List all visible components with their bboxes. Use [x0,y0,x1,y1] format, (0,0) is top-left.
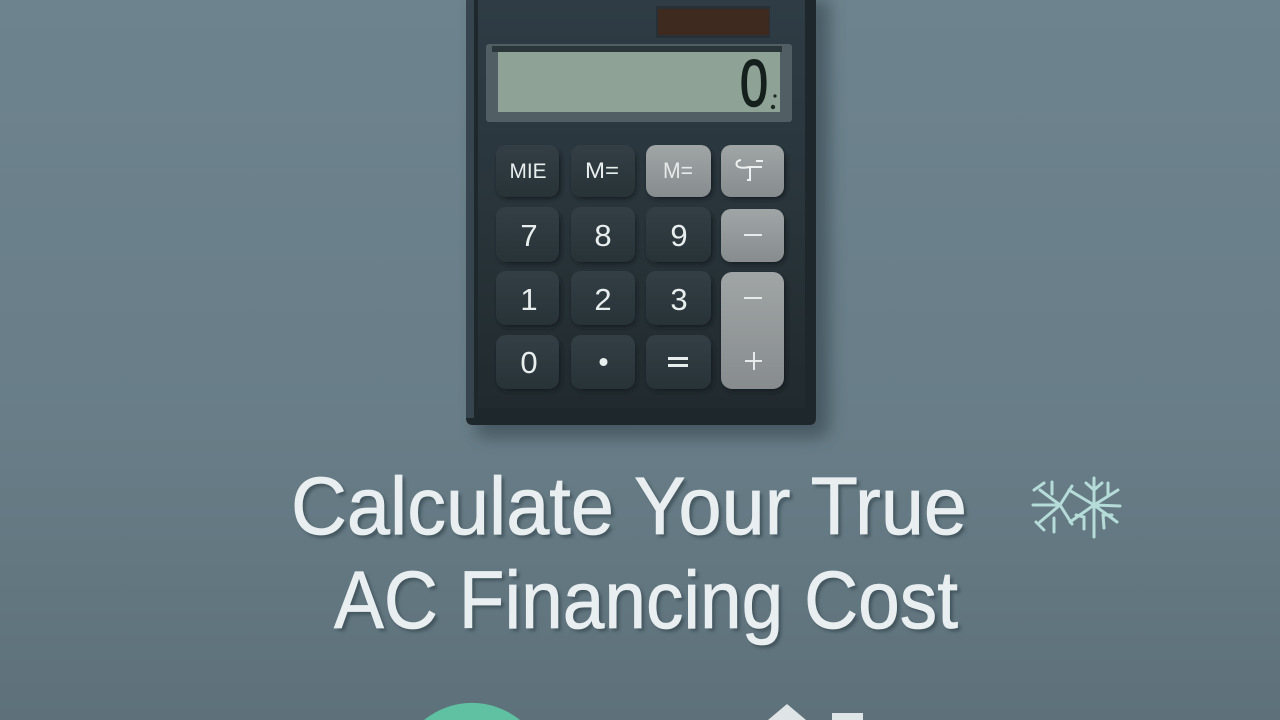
title text: AC Financing Cost [334,555,958,646]
key row 1: M= [663,158,693,183]
key row 2: 7 [520,218,538,253]
key row 2: 9 [670,218,688,253]
title [291,461,970,649]
key row 1: MIE [510,160,546,183]
display digit: 0 [740,46,768,120]
key row 3: 1 [520,282,538,317]
title text: Calculate Your True [291,461,967,552]
display [486,44,792,122]
icon: snowflake [1033,478,1120,537]
icon: house [768,704,863,720]
title shadow: Calculate Your True [294,464,970,555]
title text [291,461,967,646]
calculator body [466,0,816,425]
key row 1 [496,145,786,199]
keypad [496,145,786,391]
tall plus key [721,272,786,391]
title shadow: AC Financing Cost [337,558,961,649]
key row 3: 2 [594,282,612,317]
calculator [466,0,830,438]
key row 4 [496,335,713,391]
solar panel [656,6,770,38]
icon: green circle [424,703,520,720]
title shadow [294,464,970,649]
key row 1: M= [585,158,619,183]
key row 3: 3 [670,282,688,317]
key row 2: 8 [594,218,612,253]
key row 2 [496,207,786,264]
key row 4: 0 [520,345,538,380]
key row 3 [496,271,713,327]
calculator shadow [476,0,830,438]
